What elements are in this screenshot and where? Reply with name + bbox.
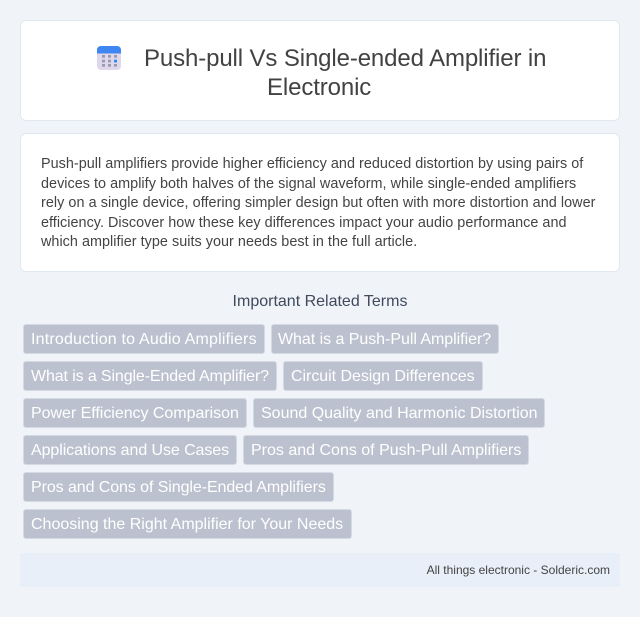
tag bbox=[23, 509, 352, 539]
text block: summary paragraph: devices to amplify both halves of the signal waveform, while single-ended amplifiers bbox=[41, 176, 576, 192]
tag: Applications and Use Cases bbox=[31, 442, 229, 459]
tag bbox=[23, 361, 277, 391]
tag bbox=[243, 435, 529, 465]
title bbox=[144, 45, 546, 101]
footer bbox=[20, 553, 620, 587]
footer: All things electronic - Solderic.com bbox=[427, 563, 610, 577]
tag: What is a Push-Pull Amplifier? bbox=[278, 331, 491, 348]
text block: summary paragraph: efficiency. Discover how these key differences impact your audio performance and bbox=[41, 214, 567, 230]
tag: Pros and Cons of Single-Ended Amplifiers bbox=[31, 479, 326, 496]
tag bbox=[23, 472, 334, 502]
tag: Pros and Cons of Push-Pull Amplifiers bbox=[251, 442, 521, 459]
tag: What is a Single-Ended Amplifier? bbox=[31, 368, 269, 385]
text block: summary paragraph: Push-pull amplifiers provide higher efficiency and reduced distortion by using pairs of bbox=[41, 156, 583, 172]
tag: Introduction to Audio Amplifiers bbox=[31, 331, 257, 348]
tag bbox=[283, 361, 483, 391]
heading: related terms: Important Related Terms bbox=[233, 293, 407, 310]
tag bbox=[271, 324, 499, 354]
panel: title card bbox=[20, 20, 620, 121]
tag bbox=[253, 398, 545, 428]
panel: summary bbox=[20, 133, 620, 272]
tag bbox=[23, 435, 237, 465]
text block: summary paragraph: rely on a single device, offering simpler design but often with more distortion and lower bbox=[41, 195, 596, 211]
panel: related term tags bbox=[23, 324, 545, 539]
title: Electronic bbox=[267, 74, 371, 101]
tag: Circuit Design Differences bbox=[291, 368, 475, 385]
tag: Sound Quality and Harmonic Distortion bbox=[261, 405, 538, 422]
text block: summary paragraph bbox=[41, 156, 596, 250]
tag bbox=[23, 324, 265, 354]
title: Push-pull Vs Single-ended Amplifier in bbox=[144, 45, 546, 72]
tag: Power Efficiency Comparison bbox=[31, 405, 239, 422]
tag bbox=[23, 398, 247, 428]
text block: summary paragraph: which amplifier type suits your needs best in the full article. bbox=[41, 234, 417, 250]
tag: Choosing the Right Amplifier for Your Needs bbox=[31, 516, 343, 533]
icon: calendar bbox=[97, 46, 121, 70]
